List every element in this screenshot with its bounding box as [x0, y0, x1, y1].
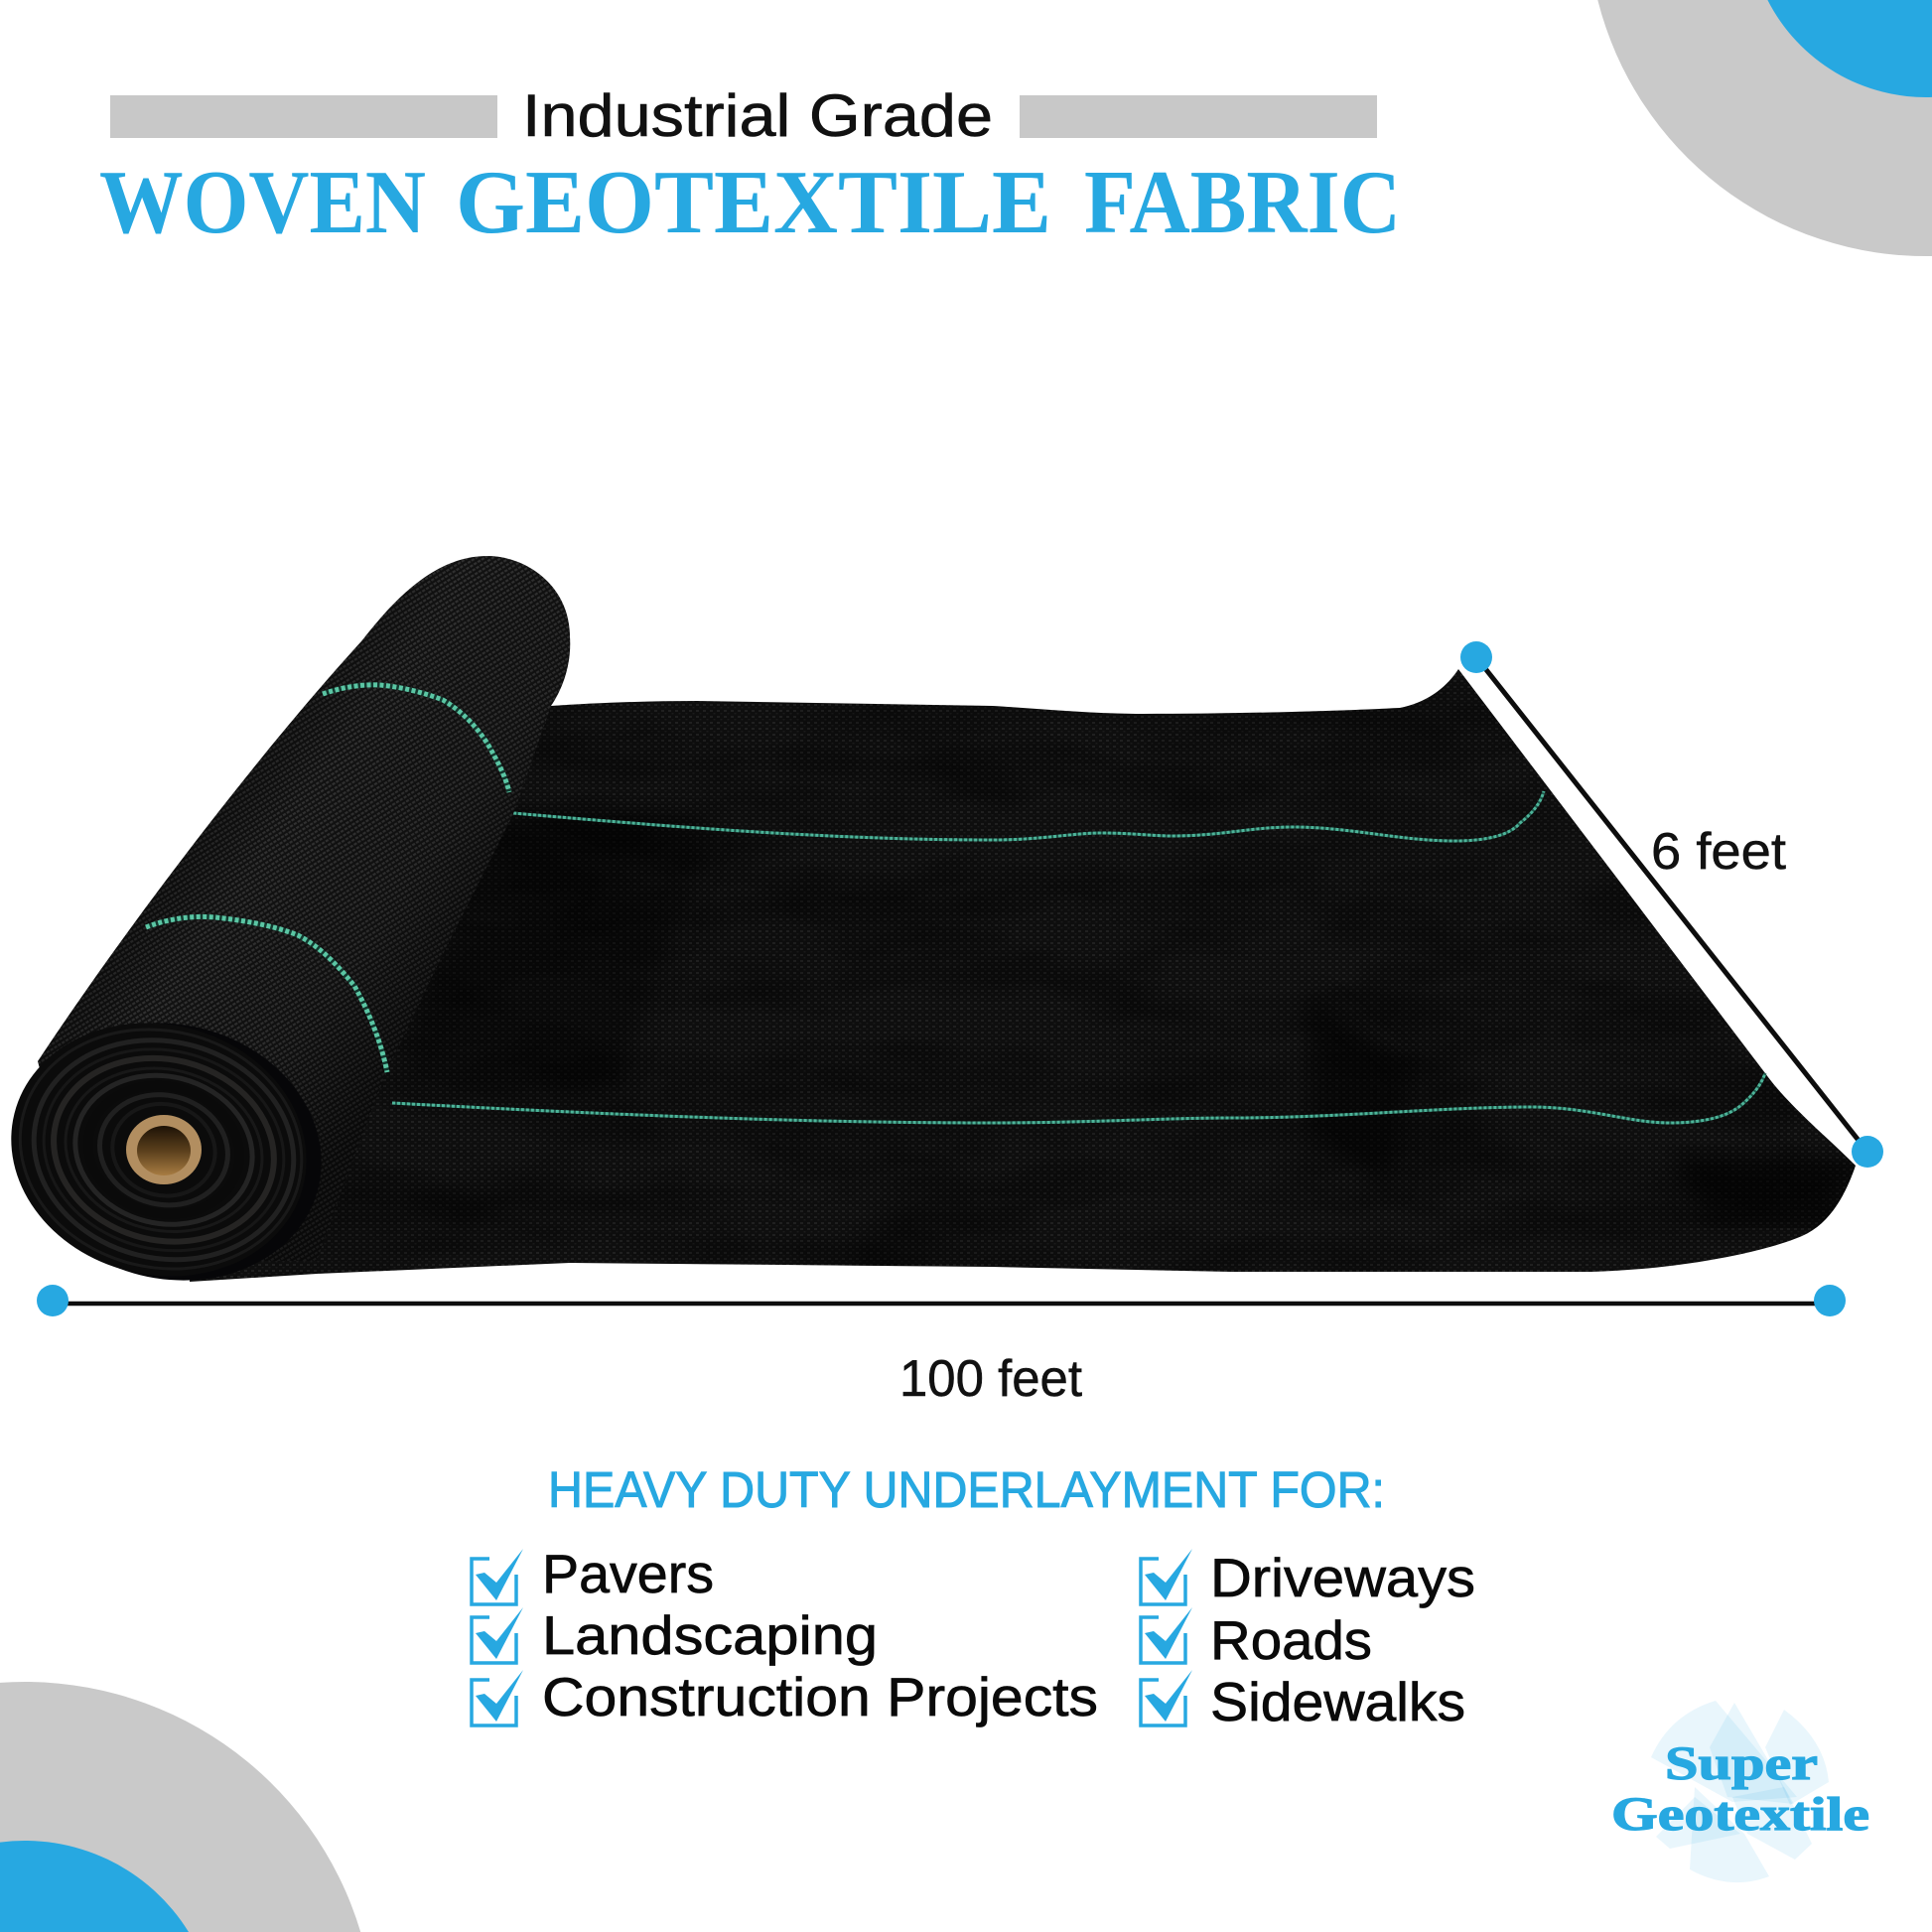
green stripe: sheet upper	[513, 791, 1544, 841]
item: roads: Roads	[1210, 1609, 1372, 1671]
cardboard core	[126, 1115, 202, 1184]
item: pavers: Pavers	[542, 1543, 714, 1604]
item: construction projects: Construction Projects	[542, 1666, 1098, 1727]
item: landscaping: Landscaping	[542, 1604, 878, 1666]
heading: uses: HEAVY DUTY UNDERLAYMENT FOR:	[548, 1461, 1385, 1518]
icon: checkbox sidewalks	[1141, 1670, 1192, 1725]
header: grey bars with subtitle	[110, 82, 1377, 149]
title: GEOTEXTILE	[456, 152, 1051, 252]
dimension: 6 feet: 6 feet	[1651, 823, 1787, 881]
green stripe: roll lower	[146, 916, 387, 1072]
logo wordmark: Super	[1665, 1737, 1818, 1790]
checklist: left column	[472, 1543, 1098, 1727]
corner decoration: bottom left	[0, 1682, 360, 1932]
title: WOVEN	[99, 152, 426, 252]
logo watermark fan	[1651, 1701, 1829, 1882]
roll end face with concentric layers	[0, 992, 348, 1311]
icon: checkbox pavers	[472, 1549, 523, 1604]
checklist: right column	[1141, 1547, 1475, 1732]
icon: checkbox landscaping	[472, 1607, 523, 1663]
dimension: 100 feet: 100 feet	[899, 1350, 1083, 1408]
dimension: 100 feet	[37, 1285, 1846, 1408]
item: sidewalks: Sidewalks	[1210, 1671, 1465, 1732]
item: driveways: Driveways	[1210, 1547, 1475, 1608]
logo: Super Geotextile	[1611, 1701, 1869, 1882]
title: FABRIC	[1084, 152, 1401, 252]
green stripe: roll upper	[323, 685, 509, 792]
icon: checkbox driveways	[1141, 1549, 1192, 1604]
header: grey bars with subtitle: Industrial Grade	[522, 82, 993, 149]
roll body	[38, 556, 570, 1261]
icon: checkbox construction	[472, 1670, 523, 1725]
green stripe: sheet lower	[392, 1073, 1765, 1123]
title	[99, 152, 1401, 252]
logo: Super Geotextile: Geotextile	[1611, 1788, 1869, 1841]
fabric roll illustration	[0, 556, 1866, 1311]
icon: checkbox roads	[1141, 1607, 1192, 1663]
corner decoration: top right	[1597, 0, 1932, 256]
dimension: 6 feet	[1460, 641, 1883, 1168]
unrolled fabric sheet	[189, 665, 1866, 1286]
